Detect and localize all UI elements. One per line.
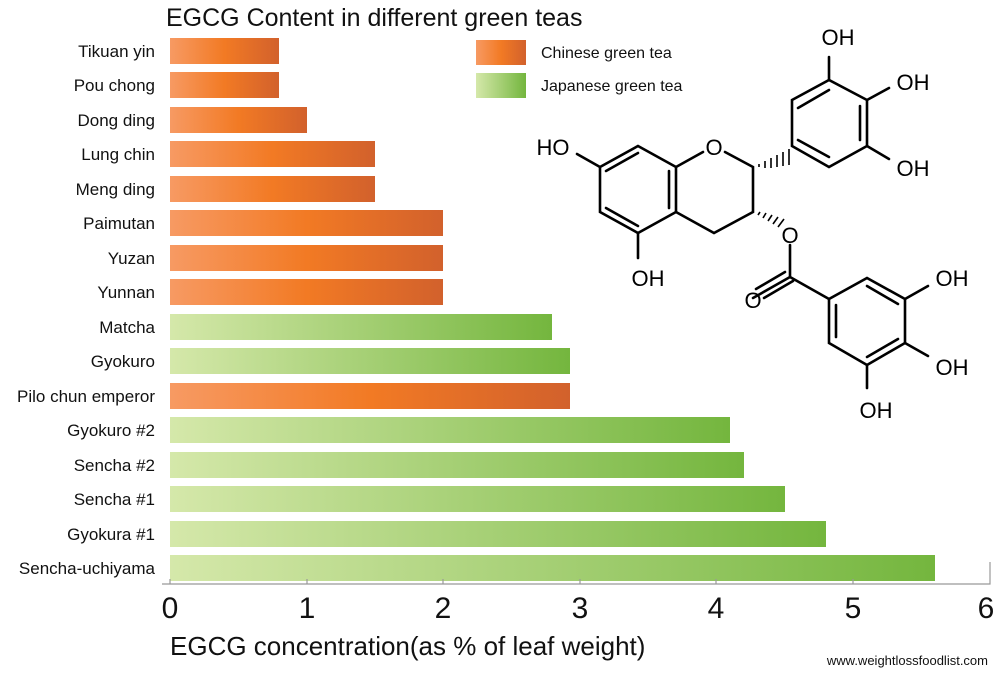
molecule labels: OH [896, 156, 930, 181]
x axis: 3 [572, 592, 588, 625]
molecule labels: OH [860, 398, 892, 423]
molecule labels: OH [896, 70, 930, 95]
bar chart: Sencha #1 [74, 490, 155, 509]
molecule labels: O [781, 223, 799, 248]
molecule labels: OH [632, 266, 664, 291]
bar chart: Matcha [99, 318, 156, 337]
x axis: 5 [845, 592, 861, 625]
bar chart: Sencha-uchiyama [19, 559, 156, 578]
axis label: EGCG concentration(as % of leaf weight) [170, 631, 645, 661]
legend: Chinese green tea [541, 45, 672, 62]
x axis: 0 [162, 592, 178, 625]
bar chart: Yunnan [97, 283, 155, 302]
source: www.weightlossfoodlist.com [826, 653, 988, 668]
legend: Japanese green tea [541, 78, 683, 95]
bar chart: Lung chin [81, 145, 155, 164]
molecule labels: OH [936, 266, 968, 291]
bar chart: Meng ding [76, 180, 155, 199]
bar chart: Gyokuro [91, 352, 155, 371]
molecule: EGCG [577, 57, 928, 388]
bar chart: Tikuan yin [78, 42, 155, 61]
molecule labels: HO [536, 135, 570, 160]
bar chart: Gyokuro #2 [67, 421, 155, 440]
bar chart: Dong ding [77, 111, 155, 130]
bar chart: Paimutan [83, 214, 155, 233]
hashed bonds [758, 149, 789, 227]
legend [476, 40, 683, 98]
x axis: 6 [978, 592, 994, 625]
molecule labels [536, 25, 968, 423]
bar chart: Pou chong [74, 76, 155, 95]
molecule labels: OH [822, 25, 854, 50]
x axis: 4 [708, 592, 724, 625]
bar chart: Gyokura #1 [67, 525, 155, 544]
bar chart: Yuzan [108, 249, 155, 268]
x axis: 2 [435, 592, 451, 625]
bar chart: Sencha #2 [74, 456, 155, 475]
molecule labels: O [705, 135, 723, 160]
bar chart [17, 38, 935, 581]
molecule labels: O [744, 288, 762, 313]
molecule labels: OH [936, 355, 968, 380]
bar chart: Pilo chun emperor [17, 387, 155, 406]
x axis [162, 562, 994, 625]
x axis: 1 [299, 592, 315, 625]
title: EGCG Content in different green teas [166, 4, 582, 32]
